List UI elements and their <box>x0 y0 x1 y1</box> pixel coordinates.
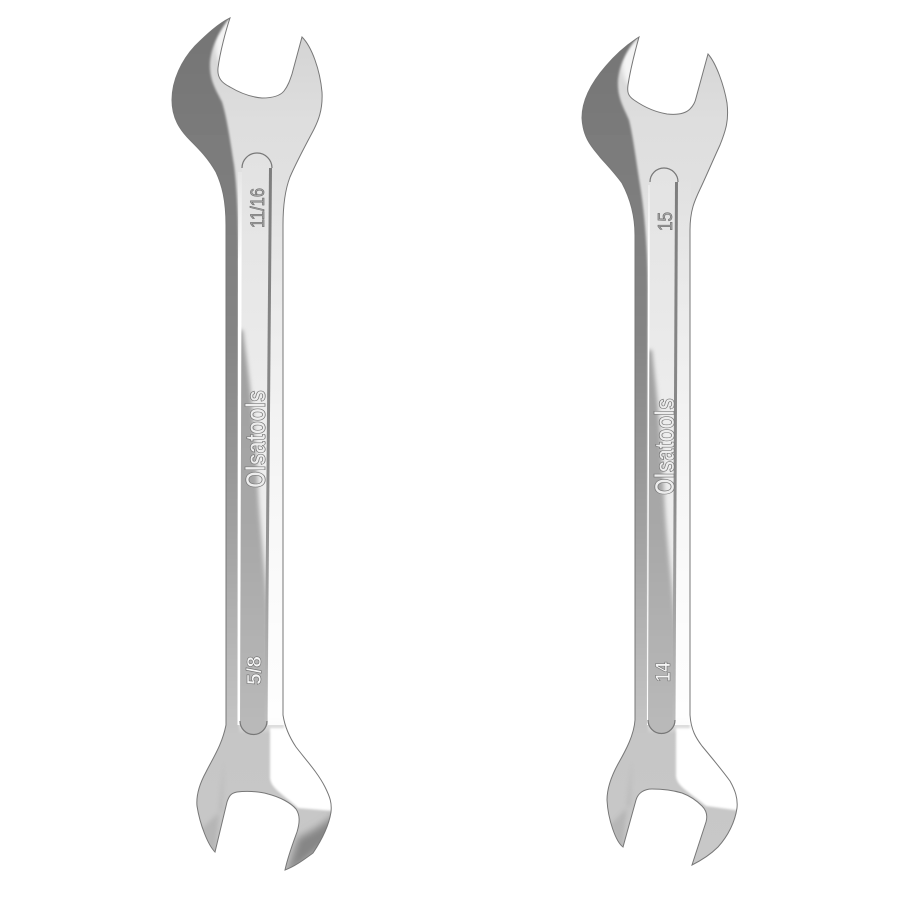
size marking 14: 14 <box>652 662 675 682</box>
logo Olsatools: Olsatools <box>240 390 271 488</box>
left wrench shading <box>150 14 345 878</box>
size marking 11/16: 11/16 <box>248 188 269 228</box>
left wrench <box>172 17 332 871</box>
logo Olsatools: Olsatools <box>649 398 680 495</box>
right wrench <box>582 36 738 866</box>
left wrench body <box>172 18 331 870</box>
size marking 5/8: 5/8 <box>244 656 266 685</box>
left wrench outline <box>172 18 331 870</box>
illustration: two double open-end wrenches <box>172 17 738 871</box>
right wrench recessed slot <box>644 168 678 745</box>
left wrench recessed slot <box>236 153 272 745</box>
right wrench outline <box>582 37 737 865</box>
size marking 15: 15 <box>655 212 677 231</box>
right wrench shading <box>582 37 738 864</box>
right wrench body <box>582 37 737 865</box>
